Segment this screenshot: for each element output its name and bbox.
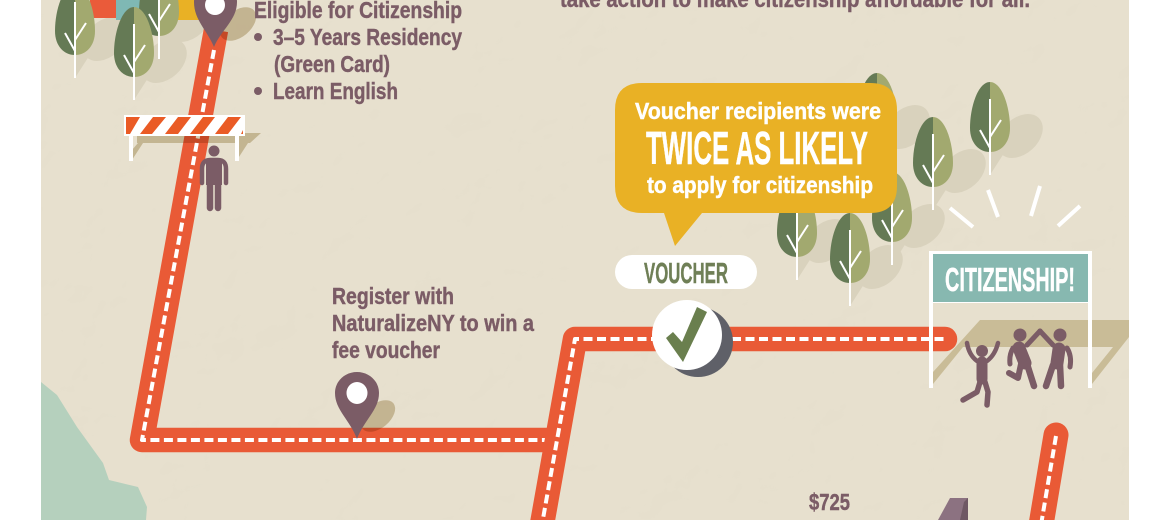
register text: Register with: [332, 283, 454, 309]
trees and houses at the start of the road: [55, 0, 220, 100]
callout: voucher recipients: [615, 83, 897, 246]
tree: [830, 213, 870, 306]
tree: [970, 82, 1010, 175]
tree: [777, 187, 817, 280]
eligibility text block: 3–5 Years Residency: [273, 24, 462, 50]
voucher label: [615, 255, 757, 290]
fee column top: [938, 498, 968, 520]
callout: voucher recipients: TWICE AS LIKELY: [646, 122, 868, 174]
icon: check mark: [652, 300, 733, 377]
register text: [332, 283, 534, 363]
eligibility text block: (Green Card): [274, 51, 390, 77]
jumping person: [963, 343, 998, 405]
voucher label: VOUCHER: [644, 258, 728, 290]
road: second section to citizenship: [541, 339, 946, 520]
eligibility text block: Learn English: [273, 78, 398, 104]
tree: [139, 0, 179, 59]
icon: location pin on road: [335, 372, 401, 439]
price label: $725: [809, 489, 850, 515]
people celebrating: [963, 328, 1071, 405]
road barrier: [124, 115, 261, 161]
register text: NaturalizeNY to win a: [332, 310, 534, 336]
celebration rays: [950, 186, 1080, 227]
callout: voucher recipients: Voucher recipients were: [635, 98, 881, 124]
person waiting at barrier: [202, 146, 226, 208]
road: lower right section: [1041, 435, 1056, 520]
callout: voucher recipients: to apply for citizenship: [647, 172, 873, 198]
finish line banner: [929, 251, 1129, 388]
eligibility text block: [254, 0, 462, 104]
map: teal water area: [41, 382, 147, 520]
road: first section with dashes: [142, 30, 552, 440]
high-five person left: [1009, 328, 1040, 386]
finish line banner: CITIZENSHIP!: [945, 261, 1075, 298]
forest near the voucher: [777, 73, 1051, 306]
tree: [913, 117, 953, 210]
register text: fee voucher: [332, 337, 440, 363]
tree: [857, 73, 897, 166]
houses: [90, 0, 206, 20]
icon: location pin at start: [194, 0, 262, 47]
tree: [114, 7, 154, 100]
high-five person right: [1040, 328, 1071, 386]
tree: [55, 0, 95, 78]
tree: [872, 172, 912, 265]
